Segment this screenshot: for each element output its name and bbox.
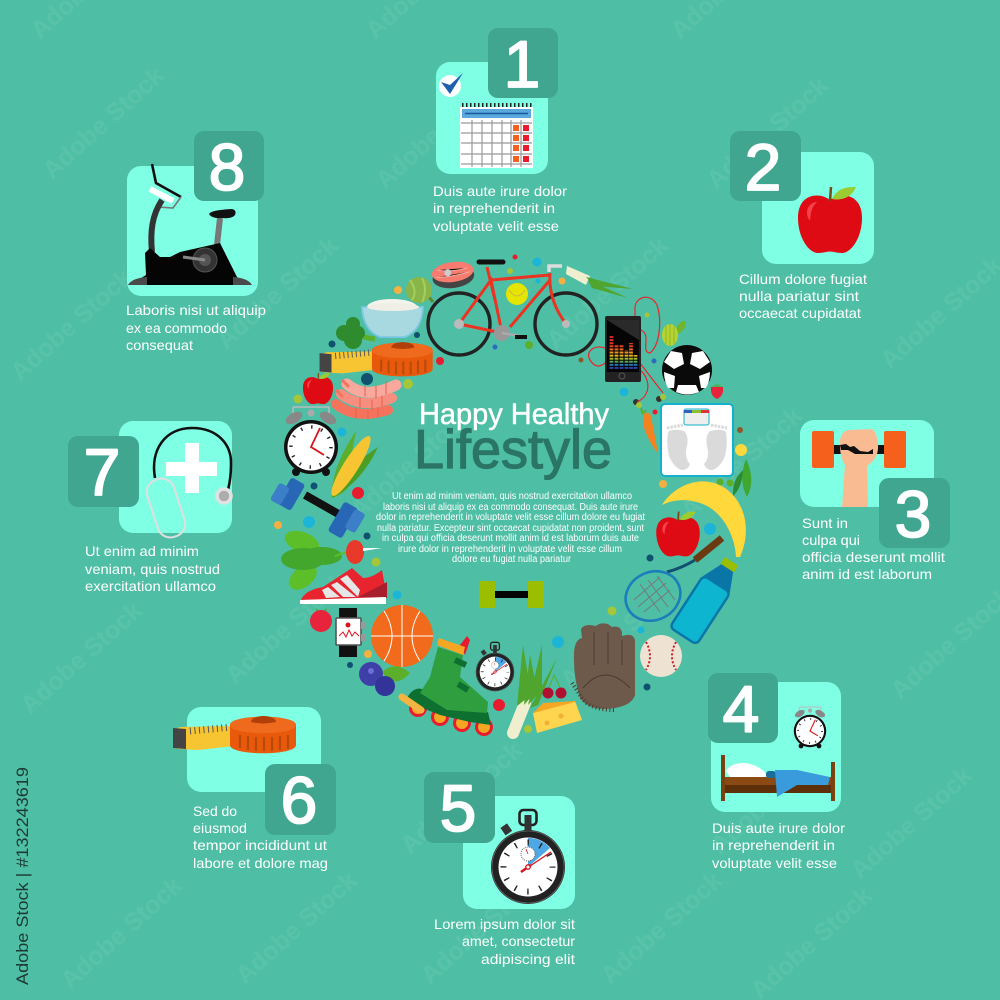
number 4 box (708, 673, 778, 743)
decorative dots (274, 254, 747, 733)
ring: small dumbbell (479, 581, 544, 608)
watermark pattern: Adobe Stock (845, 761, 978, 884)
watermark pattern: Adobe Stock (395, 736, 528, 859)
text 1: Duis aute irure dolor (433, 183, 567, 199)
text 2: Cillum dolore fugiat (739, 271, 867, 287)
ring: rice bowl (362, 299, 423, 337)
icon: stopwatch (491, 810, 565, 904)
text 3 (802, 515, 945, 582)
panel 1: calendar (436, 27, 558, 174)
ring: shrimp (332, 381, 396, 419)
panel 3: dumbbell in hand (800, 420, 950, 551)
text 2: nulla pariatur sint (739, 288, 859, 304)
text 1 (433, 183, 567, 234)
icon: stethoscope (143, 428, 231, 541)
watermark pattern: Adobe Stock (15, 596, 148, 719)
stock credit: Adobe Stock | #132243619 (13, 767, 32, 985)
ring: broccoli (336, 317, 375, 349)
number 1 box (488, 28, 558, 98)
watermark pattern: Adobe Stock (37, 61, 170, 184)
ring: smartwatch (336, 608, 365, 657)
ring: baseball (640, 635, 682, 677)
text 7: exercitation ullamco (85, 578, 216, 594)
watermark pattern: Adobe Stock (230, 866, 363, 989)
text 7 (85, 543, 220, 594)
ring: basketball (371, 605, 433, 667)
text 1: in reprehenderit in (433, 200, 555, 216)
number 4: 4 (723, 672, 759, 746)
center paragraph: nulla pariatur. Excepteur sint occaecat cupidatat non proident, sunt (377, 523, 644, 534)
center paragraph: in culpa qui officia deserunt mollit anim id est laborum duis aute (382, 533, 639, 544)
watermark pattern: Adobe Stock (370, 71, 503, 194)
watermark pattern: Adobe Stock (5, 263, 138, 386)
ring: strawberry (711, 384, 723, 399)
ring: bicycle (428, 262, 597, 355)
text 4: Duis aute irure dolor (712, 820, 845, 836)
panel 7: stethoscope (68, 421, 232, 541)
number 8 box (194, 131, 264, 201)
text 4: voluptate velit esse (712, 855, 837, 871)
icon: arm lifting dumbbell (812, 429, 906, 507)
text 5 (434, 916, 575, 967)
text 8 (126, 302, 266, 353)
text 8: Laboris nisi ut aliquip (126, 302, 266, 318)
text 7: veniam, quis nostrud (85, 561, 220, 577)
ring: leek (513, 645, 557, 733)
number 6 box (265, 764, 336, 835)
ring: baseball glove (572, 623, 635, 710)
ring: tennis ball (506, 283, 528, 305)
icon: alarm clock (794, 707, 826, 748)
number 1: 1 (504, 27, 540, 101)
panel 8: exercise bike (127, 130, 264, 296)
number 8: 8 (209, 130, 245, 204)
ring: alarm clock (284, 407, 338, 476)
icon: apple (798, 187, 862, 253)
text 4: in reprehenderit in (712, 837, 835, 853)
number 5: 5 (440, 771, 476, 845)
center paragraph: irure dolor in reprehenderit in voluptate velit esse cillum (398, 544, 622, 555)
center paragraph: laboris nisi ut aliquip ex ea commodo consequat. Duis aute irure (383, 502, 638, 513)
icon: check mark (439, 73, 463, 97)
text 6 (193, 803, 328, 871)
center paragraph: dolore eu fugiat nulla pariatur (452, 554, 572, 565)
number 3 box (879, 478, 950, 548)
watermark pattern: Adobe Stock (541, 231, 674, 354)
text 2 (739, 271, 867, 321)
ring: cheese (533, 701, 582, 733)
number 6: 6 (281, 763, 317, 837)
ring: gooseberry (662, 321, 686, 346)
ring: green onion (566, 266, 633, 313)
text 6: Sed do (193, 803, 237, 819)
icon: bed (721, 755, 835, 801)
center paragraph: Ut enim ad minim veniam, quis nostrud exercitation ullamco (392, 491, 632, 502)
text 2: occaecat cupidatat (739, 305, 861, 321)
ring: water bottle (670, 553, 745, 645)
watermark pattern: Adobe Stock (595, 866, 728, 989)
panel 5: stopwatch (424, 771, 575, 909)
text 3: officia deserunt mollit (802, 549, 945, 565)
watermark pattern: Adobe Stock (701, 71, 834, 194)
text 8: consequat (126, 337, 193, 353)
text 5: Lorem ipsum dolor sit (434, 916, 575, 932)
watermark pattern: Adobe Stock (211, 231, 344, 354)
ring: blueberries (359, 662, 410, 696)
text 8: ex ea commodo (126, 320, 227, 336)
number 7 box (68, 436, 139, 507)
panel 2: apple (730, 130, 874, 264)
ring: pea pod (733, 459, 751, 497)
text 7: Ut enim ad minim (85, 543, 199, 559)
watermark pattern: Adobe Stock (345, 401, 478, 524)
watermark pattern: Adobe Stock (220, 566, 353, 689)
text 3: anim id est laborum (802, 566, 932, 582)
watermark pattern: Adobe Stock (55, 871, 188, 994)
text 6: eiusmod (193, 820, 247, 836)
ring: dumbbell (270, 477, 366, 539)
watermark pattern: Adobe Stock (705, 736, 838, 859)
ring: apple (303, 373, 333, 404)
icon: measuring tape (173, 716, 296, 753)
panel 6: measuring tape (173, 707, 336, 837)
text 4 (712, 820, 845, 871)
ring: raspberry (310, 608, 332, 632)
ring: tennis racket (617, 538, 722, 630)
number 2 box (730, 131, 801, 201)
ring: corn (326, 431, 378, 500)
ring: salmon (431, 259, 476, 291)
ring: running shoe (300, 568, 387, 604)
text 3: Sunt in (802, 515, 848, 531)
ring: earphones cord (589, 297, 663, 402)
watermark pattern: Adobe Stock (675, 401, 808, 524)
ring: bathroom scale (661, 404, 733, 476)
text 6: labore et dolore mag (193, 855, 328, 871)
text 6: tempor incididunt ut (193, 837, 327, 853)
ring: smartphone with equalizer (605, 316, 641, 382)
ring: radish with leaves (281, 526, 382, 595)
watermark pattern: Adobe Stock (415, 866, 548, 989)
icon: exercise bike (128, 164, 252, 285)
center paragraph (376, 491, 645, 565)
icon: medical cross (166, 443, 217, 493)
ring: carrot (641, 408, 658, 453)
ring: soccer ball (662, 345, 712, 395)
ring: artichoke (406, 277, 433, 303)
number 7: 7 (84, 435, 120, 509)
watermark pattern: Adobe Stock (555, 571, 688, 694)
icon: calendar (460, 105, 533, 168)
text 5: adipiscing elit (481, 951, 575, 967)
panel 4: sleep (708, 672, 841, 812)
text 1: voluptate velit esse (433, 218, 559, 234)
number 5 box (424, 772, 495, 843)
text 3: culpa qui (802, 532, 860, 548)
text 5: amet, consectetur (462, 933, 575, 949)
center paragraph: dolor in reprehenderit in voluptate velit esse cillum dolore eu fugiat (376, 512, 645, 523)
ring: measuring tape (320, 342, 433, 376)
ring: apple (656, 512, 700, 556)
ring: cherries (542, 675, 566, 698)
title: Happy Healthy (419, 398, 609, 431)
number 3: 3 (895, 477, 931, 551)
title: Lifestyle (414, 418, 612, 480)
ring: stopwatch (476, 642, 514, 691)
ring: banana (662, 481, 746, 557)
ring: rollerblade (402, 636, 493, 736)
number 2: 2 (745, 130, 781, 204)
